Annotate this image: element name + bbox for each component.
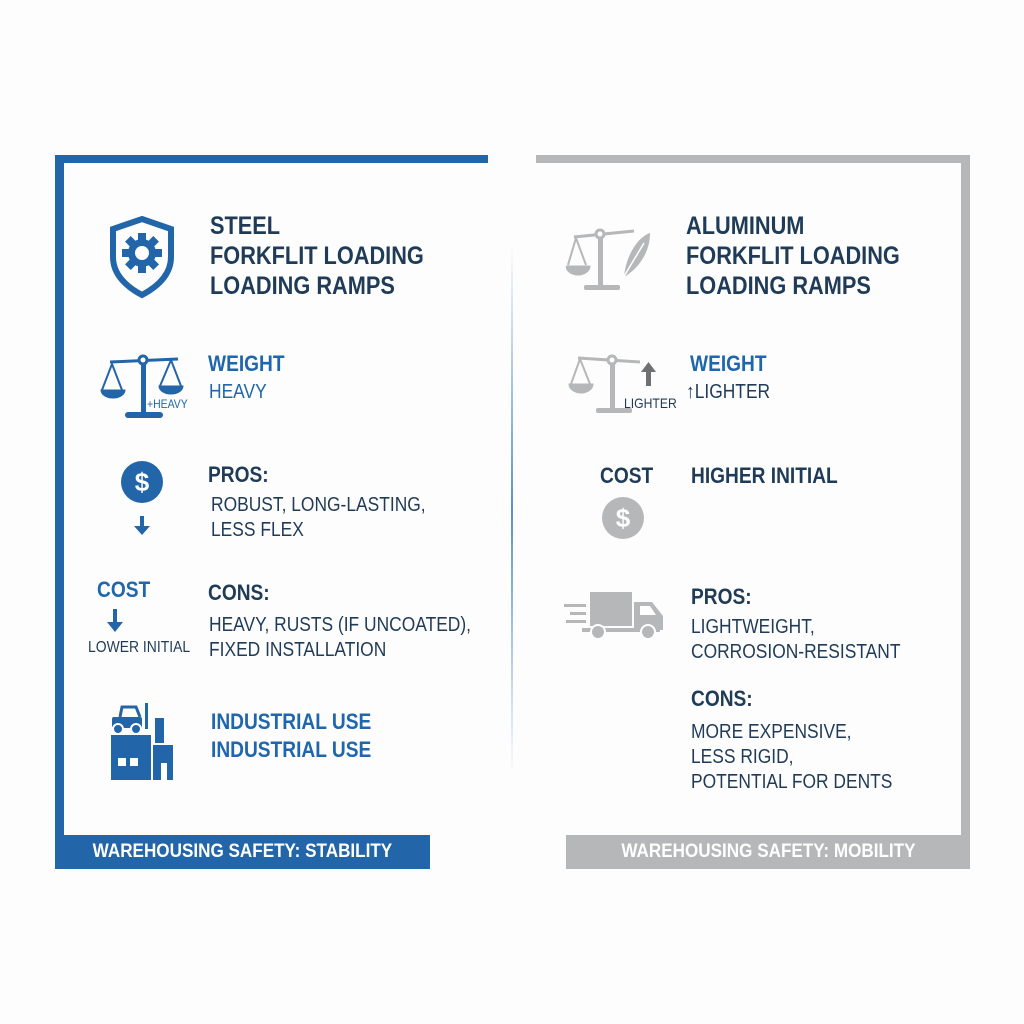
heading: weight: WEIGHT (208, 351, 285, 376)
title: steel: LOADING RAMPS (210, 272, 395, 300)
icon: dollar down: $ (135, 467, 150, 497)
banner: mobility: WAREHOUSING SAFETY: MOBILITY (621, 841, 915, 862)
text: cons (691, 721, 892, 793)
heading: weight: WEIGHT (690, 351, 767, 376)
cost label: COST (97, 577, 150, 602)
text: pros: ROBUST, LONG-LASTING, (211, 494, 426, 516)
banner: mobility (566, 835, 970, 869)
title: steel: FORKFLIT LOADING (210, 242, 424, 270)
text: industrial use (211, 709, 371, 762)
icon: scale lighter (568, 354, 656, 413)
icon: scale feather (566, 228, 650, 290)
text: pros: LESS FLEX (211, 519, 304, 541)
icon: dollar down (121, 461, 163, 535)
text: cons: MORE EXPENSIVE, (691, 721, 852, 743)
text: pros: CORROSION-RESISTANT (691, 641, 900, 663)
text: cons: LESS RIGID, (691, 746, 793, 768)
icon: dollar gray: $ (616, 503, 631, 533)
cost label (88, 577, 190, 656)
text: higher initial: HIGHER INITIAL (691, 463, 838, 488)
text: industrial use: INDUSTRIAL USE (211, 737, 371, 762)
banner: stability (55, 835, 430, 869)
text: pros: LIGHTWEIGHT, (691, 616, 815, 638)
icon: scale heavy (100, 354, 184, 418)
text: pros (691, 616, 900, 663)
icon: truck (564, 592, 663, 638)
heading: cost: COST (600, 463, 653, 488)
title: aluminum: LOADING RAMPS (686, 272, 871, 300)
banner: stability: WAREHOUSING SAFETY: STABILITY (93, 841, 392, 862)
panel: aluminum (536, 155, 970, 869)
label: +heavy: +HEAVY (147, 397, 188, 411)
text: heavy: HEAVY (209, 381, 267, 403)
text: lighter: ↑LIGHTER (686, 381, 770, 403)
title: aluminum: ALUMINUM (686, 212, 804, 240)
icon: factory forklift (111, 703, 173, 780)
heading: cons: CONS: (691, 686, 753, 711)
heading: cons: CONS: (208, 580, 270, 605)
label: lighter small: LIGHTER (624, 395, 677, 411)
text: industrial use: INDUSTRIAL USE (211, 709, 371, 734)
title: steel (210, 212, 424, 300)
aluminum panel frame (536, 155, 970, 835)
divider line (511, 240, 513, 780)
icon: dollar gray (602, 497, 644, 539)
text: cons (209, 614, 471, 661)
heading: pros: PROS: (691, 584, 752, 609)
title: steel: STEEL (210, 212, 280, 240)
title: aluminum: FORKFLIT LOADING (686, 242, 900, 270)
text: pros (211, 494, 426, 541)
title: aluminum (686, 212, 900, 300)
text: cons: HEAVY, RUSTS (IF UNCOATED), (209, 614, 471, 636)
heading: pros: PROS: (208, 462, 269, 487)
steel panel frame (55, 155, 488, 835)
text: cons: FIXED INSTALLATION (209, 639, 386, 661)
cost label: LOWER INITIAL (88, 639, 190, 656)
text: cons: POTENTIAL FOR DENTS (691, 771, 892, 793)
icon: shield gear (110, 216, 174, 298)
panel: steel (55, 155, 488, 869)
